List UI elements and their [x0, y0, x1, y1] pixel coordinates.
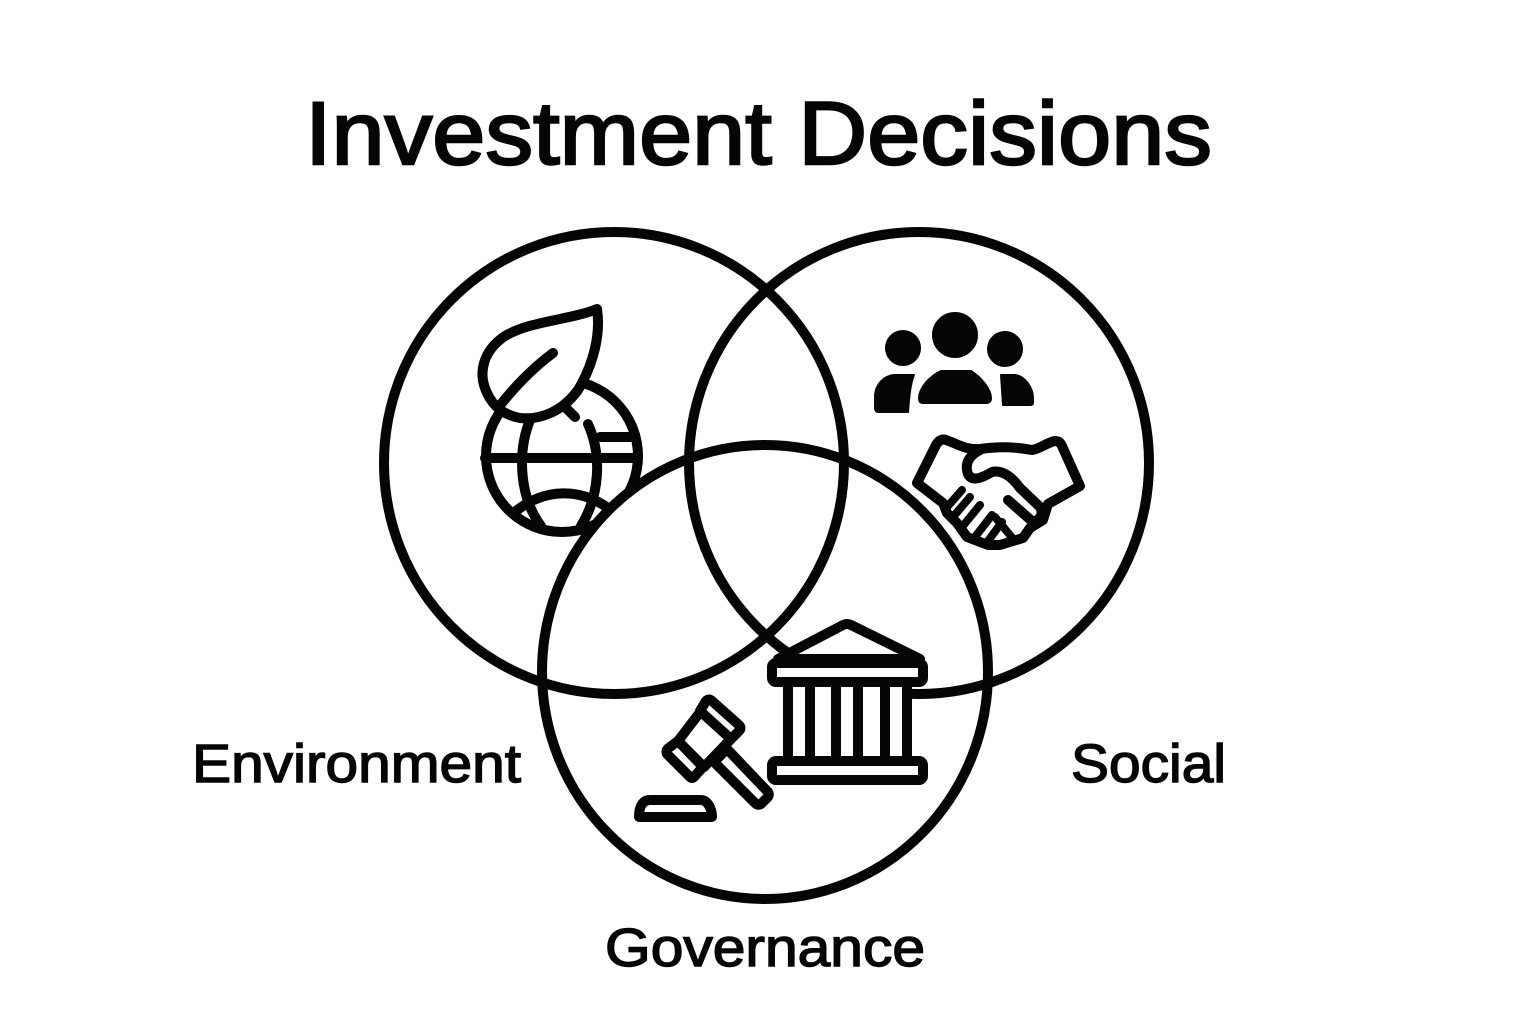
person: centre — [919, 313, 991, 403]
gavel handle — [714, 749, 769, 805]
icon: group of people — [875, 313, 1033, 412]
leaf — [483, 309, 598, 418]
gavel head — [678, 711, 731, 767]
columns — [788, 681, 907, 761]
column lines — [788, 683, 907, 759]
fingers — [948, 490, 1014, 541]
venn diagram circles — [384, 232, 1149, 899]
gavel cap: bottom — [666, 741, 703, 778]
label: environment: Environment — [192, 734, 521, 794]
pediment — [778, 624, 920, 659]
circle: environment — [384, 232, 844, 694]
gavel cap: top — [700, 700, 740, 739]
person: right — [988, 332, 1033, 405]
handshake outline — [917, 440, 1080, 545]
label: social: Social — [1071, 734, 1226, 794]
entablature — [772, 663, 923, 682]
icon: courthouse — [772, 624, 923, 780]
base — [772, 761, 923, 780]
label: governance: Governance — [605, 918, 925, 978]
circle: social — [689, 232, 1149, 694]
circle: governance — [542, 445, 988, 899]
person: left — [875, 331, 920, 412]
thumb — [967, 450, 1042, 522]
globe — [485, 380, 638, 532]
icon: handshake — [917, 440, 1080, 545]
gavel block — [639, 800, 712, 817]
title: Investment Decisions — [305, 83, 1212, 183]
icon: gavel — [639, 700, 769, 817]
icon: leaf and globe — [483, 309, 638, 532]
leaf vein — [498, 353, 553, 408]
